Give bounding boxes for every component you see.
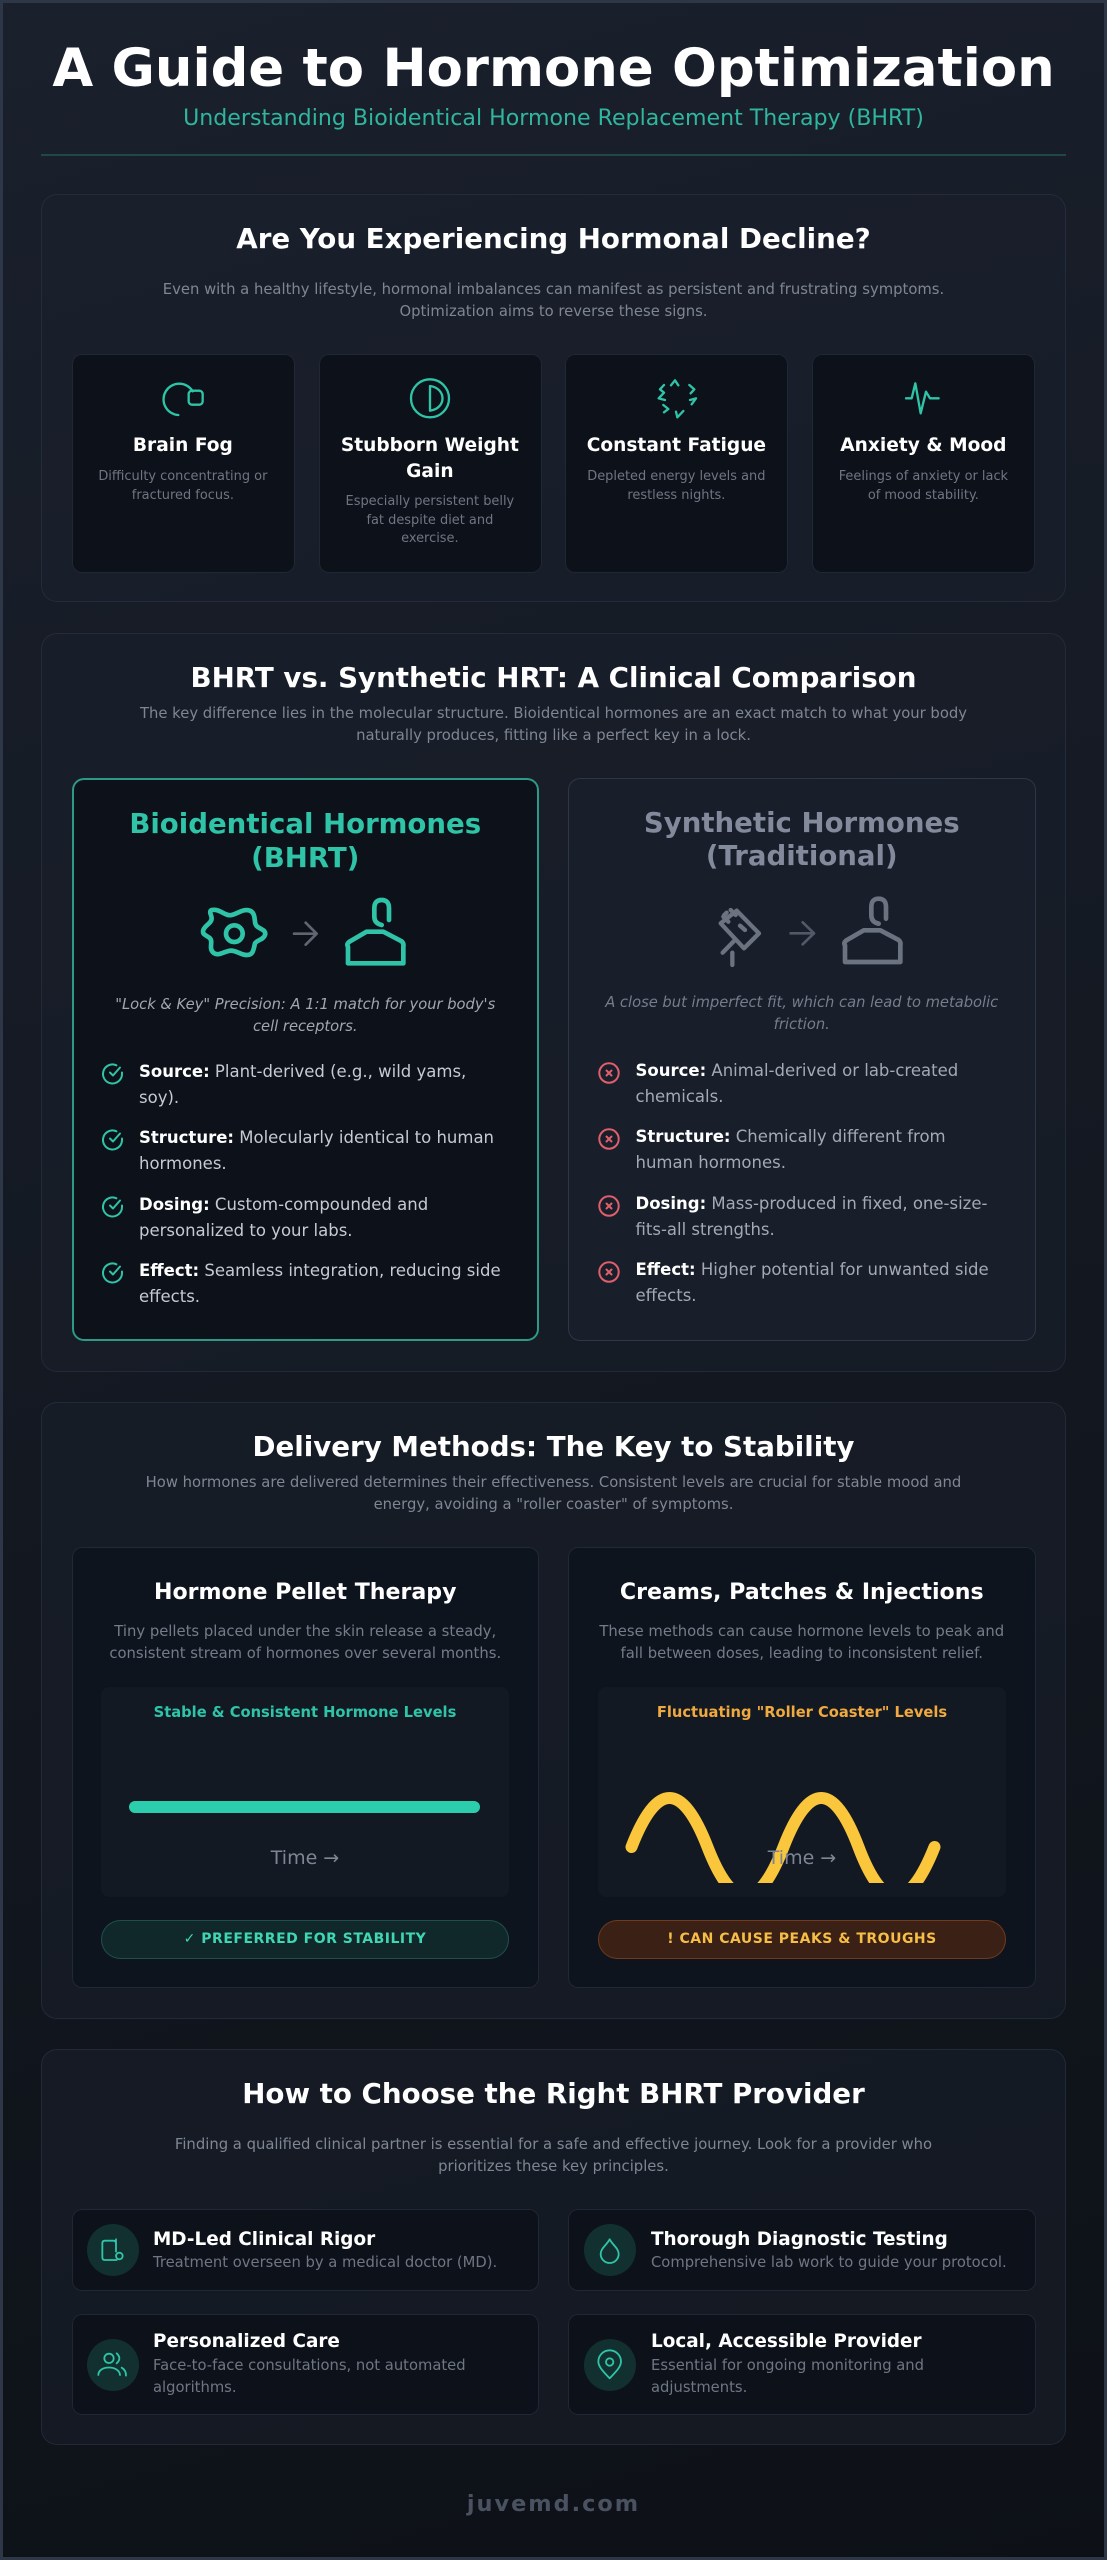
list text (636, 1061, 958, 1106)
list text (139, 1062, 466, 1107)
card description: consistent stream of hormones over several months. (109, 1645, 501, 1662)
panel: choosing a provider (41, 2049, 1066, 2445)
text: comparison intro: The key difference lies in the molecular structure. Bioidentical hormones are an exact match to what your body (140, 705, 967, 722)
card description: fat despite diet and (366, 513, 493, 528)
card description: Tiny pellets placed under the skin release a steady, (114, 1623, 496, 1640)
list text: Effect: Higher potential for unwanted side (636, 1260, 989, 1279)
card description: Especially persistent belly (346, 494, 514, 509)
heading: hormonal decline: Are You Experiencing Hormonal Decline? (236, 222, 871, 255)
card description: fractured focus. (132, 488, 234, 503)
provider description: algorithms. (153, 2379, 237, 2396)
text: delivery intro: How hormones are delivered determines their effectiveness. Consistent levels are crucial for stable mood and (146, 1474, 961, 1491)
icon: check (102, 1196, 123, 1218)
card title: (Traditional) (706, 839, 898, 872)
subtitle: Understanding Bioidentical Hormone Replacement Therapy (BHRT) (183, 105, 924, 131)
text: decline intro (163, 281, 944, 320)
card description (839, 469, 1008, 503)
icon: cross (597, 1260, 621, 1284)
provider title: MD-Led Clinical Rigor (153, 2229, 375, 2250)
icon: weight (410, 378, 450, 418)
list text: personalized to your labs. (139, 1221, 353, 1240)
chart title: Stable & Consistent Hormone Levels (154, 1704, 456, 1721)
card description: Feelings of anxiety or lack (839, 469, 1008, 484)
chart: fluctuating levels (598, 1687, 1006, 1897)
list item: dosing (598, 1194, 987, 1239)
panel: clinical comparison (41, 633, 1066, 1372)
chart: stable levels (101, 1687, 509, 1897)
card: thorough diagnostic testing (568, 2209, 1036, 2291)
list item: dosing (102, 1195, 428, 1240)
card title: Creams, Patches & Injections (620, 1579, 984, 1605)
card description: These methods can cause hormone levels to peak and (599, 1623, 1004, 1640)
icon: syringe (718, 908, 762, 968)
text: decline intro: Optimization aims to reverse these signs. (399, 303, 708, 320)
text: imperfect fit: friction. (774, 1016, 830, 1033)
title: A Guide to Hormone Optimization (52, 38, 1055, 99)
icon: receptor lock (345, 898, 406, 966)
card: brain fog (72, 354, 294, 572)
card title: Hormone Pellet Therapy (154, 1579, 457, 1605)
card title: Stubborn Weight (341, 435, 519, 456)
axis label: Time → (768, 1847, 836, 1869)
card: stubborn weight gain (318, 354, 542, 572)
list text: effects. (139, 1287, 200, 1306)
card description (98, 469, 268, 503)
list text: Structure: Chemically different from (636, 1127, 946, 1146)
provider description: Treatment overseen by a medical doctor (MD). (153, 2254, 497, 2271)
card: personalized care (72, 2314, 539, 2415)
provider description (153, 2355, 466, 2400)
card description (587, 469, 765, 503)
icon: fatigue (657, 379, 698, 418)
card title: (BHRT) (251, 841, 359, 874)
card: synthetic hormones (568, 778, 1036, 1341)
text: provider intro: Finding a qualified clinical partner is essential for a safe and effective journey. Look for a provider who (175, 2136, 932, 2153)
provider description: Comprehensive lab work to guide your protocol. (651, 2254, 1007, 2271)
list text (636, 1127, 946, 1172)
card: creams, patches and injections (568, 1547, 1036, 1988)
list item: structure (598, 1127, 946, 1172)
card description: of mood stability. (868, 488, 979, 503)
list text (636, 1257, 989, 1309)
heading: choosing a provider: How to Choose the Right BHRT Provider (242, 2077, 865, 2110)
icon: people (87, 2339, 139, 2391)
stable level line (129, 1801, 480, 1813)
list text: Structure: Molecularly identical to human (139, 1128, 494, 1147)
provider description (651, 2355, 924, 2400)
heading: comparison: BHRT vs. Synthetic HRT: A Clinical Comparison (191, 661, 916, 694)
card: local accessible provider (568, 2314, 1036, 2415)
list text: chemicals. (636, 1087, 723, 1106)
list text (636, 1191, 987, 1243)
card: anxiety and mood (812, 354, 1035, 572)
icon: cross (598, 1128, 620, 1150)
badge: preferred: ✓ PREFERRED FOR STABILITY (184, 1931, 426, 1947)
icon: check (102, 1262, 123, 1284)
card description: Depleted energy levels and (587, 469, 765, 484)
card title: Bioidentical Hormones (129, 807, 481, 840)
list text: Source: Animal-derived or lab-created (636, 1061, 958, 1080)
list item: effect (568, 1256, 1035, 1308)
card title: Constant Fatigue (587, 435, 766, 456)
card description: Difficulty concentrating or (98, 469, 267, 484)
list text: effects. (636, 1286, 697, 1305)
icon: cross (597, 1194, 621, 1218)
icon: check (102, 1129, 123, 1150)
badge: peaks and troughs (598, 1920, 1006, 1959)
card title (644, 806, 960, 872)
card title: Brain Fog (133, 435, 233, 456)
list text: fits-all strengths. (636, 1220, 775, 1239)
list text: human hormones. (636, 1153, 786, 1172)
text: comparison intro (140, 705, 967, 744)
text: imperfect fit (604, 994, 998, 1033)
footer: website: juvemd.com (467, 2491, 640, 2517)
card description (568, 1621, 1036, 1666)
provider description: adjustments. (651, 2379, 747, 2396)
card: MD-led clinical rigor (72, 2209, 539, 2291)
provider title: Local, Accessible Provider (651, 2331, 922, 2352)
list text (139, 1128, 494, 1173)
icon: check (102, 1063, 123, 1084)
provider title: Personalized Care (153, 2331, 340, 2352)
arrow (292, 921, 318, 946)
card description: fall between doses, leading to inconsistent relief. (620, 1645, 983, 1662)
badge: preferred (101, 1920, 509, 1959)
card title: Anxiety & Mood (840, 435, 1006, 456)
text: provider intro: prioritizes these key principles. (438, 2158, 669, 2175)
icon: molecule (200, 908, 268, 958)
list text (139, 1195, 428, 1240)
card: constant fatigue (565, 354, 788, 572)
badge: peaks and troughs: ! CAN CAUSE PEAKS & TROUGHS (667, 1931, 937, 1947)
list text: hormones. (139, 1154, 227, 1173)
card title: Gain (406, 461, 454, 482)
card description: restless nights. (627, 488, 725, 503)
text: decline intro: Even with a healthy lifestyle, hormonal imbalances can manifest as persistent and frustrating symptoms. (163, 281, 944, 298)
text: delivery intro: energy, avoiding a "roller coaster" of symptoms. (374, 1496, 733, 1513)
card title (341, 435, 519, 482)
card description: exercise. (401, 531, 459, 546)
icon: receptor lock (842, 896, 903, 964)
card: bioidentical hormones (72, 778, 539, 1341)
icon: pulse (904, 382, 940, 414)
fluctuating wave (598, 1687, 1006, 1883)
chart title: Fluctuating "Roller Coaster" Levels (657, 1704, 947, 1721)
panel: hormonal decline symptoms (41, 194, 1066, 602)
list item: source (598, 1061, 958, 1106)
card title (129, 807, 481, 874)
provider title: Thorough Diagnostic Testing (651, 2229, 948, 2250)
text: comparison intro: naturally produces, fitting like a perfect key in a lock. (356, 727, 751, 744)
list text: Dosing: Custom-compounded and (139, 1195, 428, 1214)
text: lock and key: "Lock & Key" Precision: A 1:1 match for your body's (115, 996, 495, 1013)
text: imperfect fit: A close but imperfect fit, which can lead to metabolic (605, 994, 998, 1011)
icon: brain fog (162, 382, 204, 416)
list text: Source: Plant-derived (e.g., wild yams, (139, 1062, 466, 1081)
list text: soy). (139, 1088, 179, 1107)
text: provider intro (41, 2134, 1066, 2179)
text: delivery intro (41, 1472, 1066, 1517)
arrow (789, 920, 816, 946)
provider description: Face-to-face consultations, not automated (153, 2357, 466, 2374)
text: lock and key (115, 996, 495, 1035)
icon: cross (598, 1062, 620, 1084)
list text: Dosing: Mass-produced in fixed, one-size- (636, 1194, 987, 1213)
icon: location pin (584, 2339, 636, 2391)
list item: source (102, 1062, 466, 1107)
card description (346, 494, 514, 546)
icon: clinician (87, 2224, 139, 2276)
text: lock and key: cell receptors. (253, 1018, 358, 1035)
axis label: Time → (271, 1847, 339, 1869)
list item: structure (102, 1128, 494, 1173)
icon: drop (584, 2224, 636, 2276)
card: hormone pellet therapy (72, 1547, 539, 1988)
list text: Effect: Seamless integration, reducing side (139, 1261, 501, 1280)
provider description: Essential for ongoing monitoring and (651, 2357, 924, 2374)
panel: delivery methods (41, 1402, 1066, 2019)
heading: delivery methods: Delivery Methods: The Key to Stability (252, 1430, 854, 1463)
card description (72, 1621, 539, 1666)
list item: effect (102, 1261, 501, 1306)
card title: Synthetic Hormones (644, 806, 960, 838)
list text (139, 1261, 501, 1306)
